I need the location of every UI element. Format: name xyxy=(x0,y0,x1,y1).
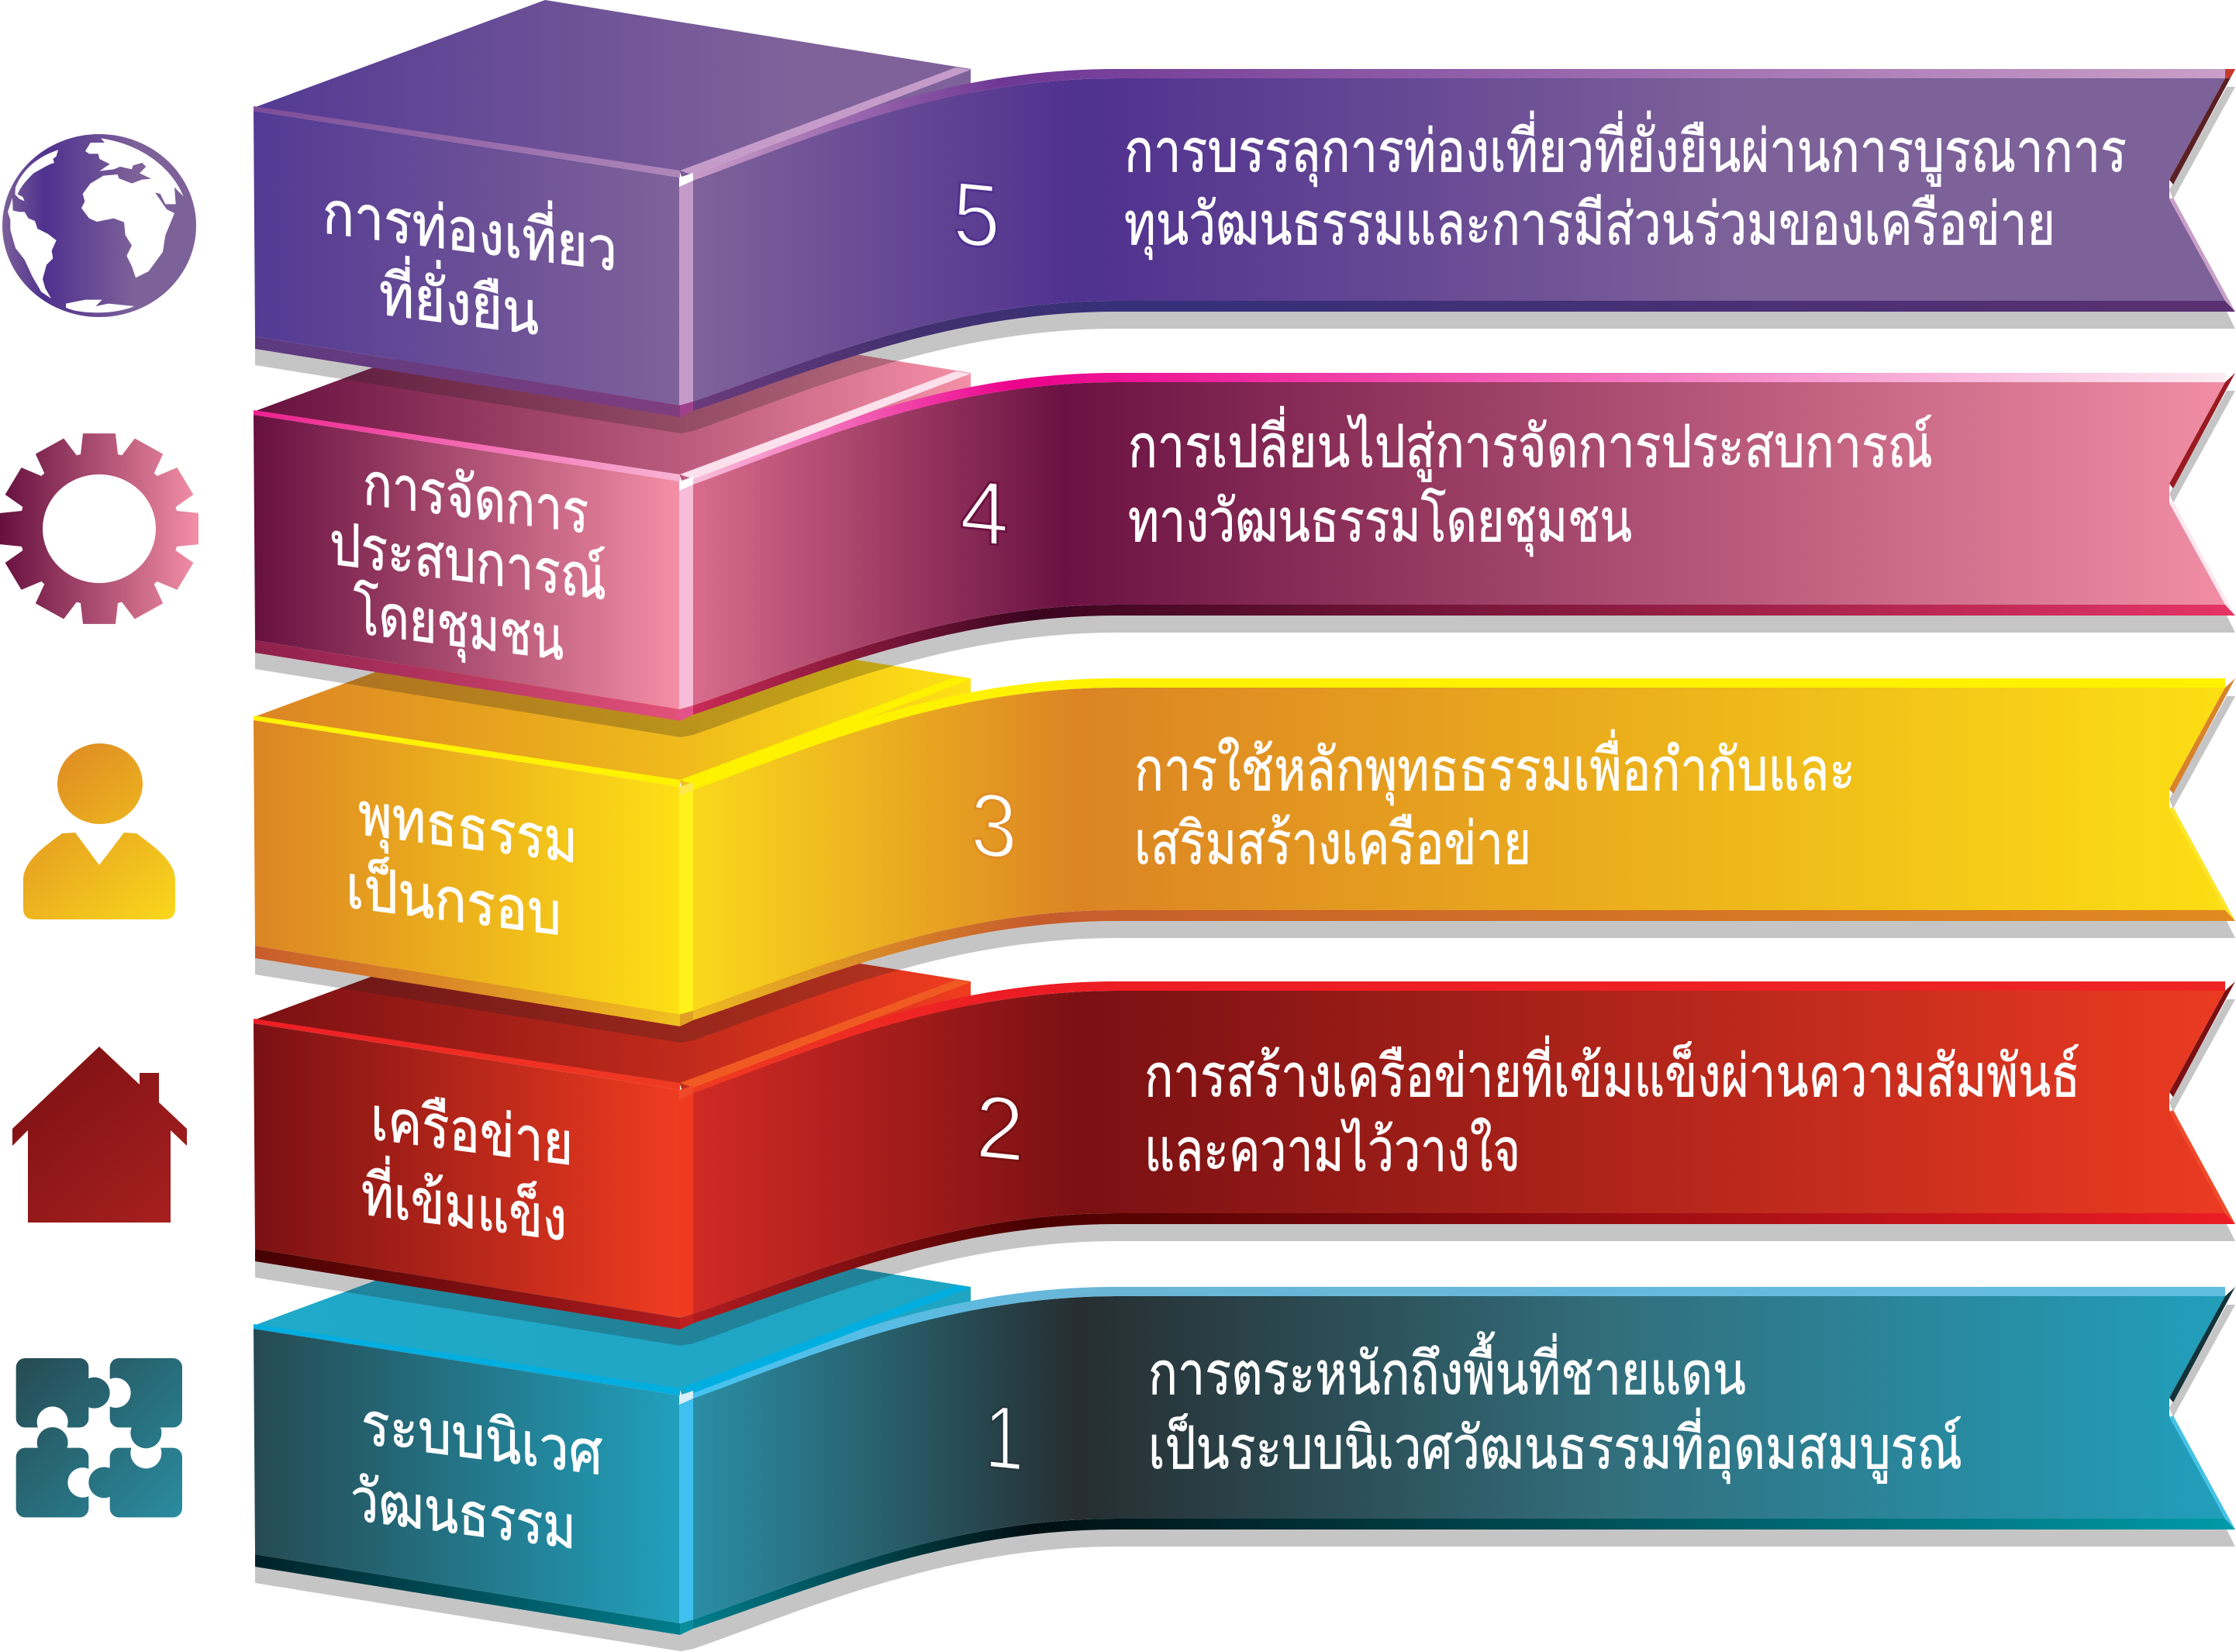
icon: puzzle xyxy=(16,1358,182,1517)
icon: gear xyxy=(0,433,198,624)
text block 1: เป็นระบบนิเวศวัฒนธรรมที่อุดมสมบูรณ์ xyxy=(1148,1408,1962,1484)
number 4: 4 xyxy=(960,460,1009,565)
heading: box label 2 xyxy=(361,1085,573,1254)
panel: level 5 sustainable tourism xyxy=(254,0,2235,433)
icon: person xyxy=(23,743,175,919)
icon: house xyxy=(12,1047,187,1223)
panel: level 4 community experience xyxy=(254,304,2235,737)
text block 1: การตระหนักถึงพื้นที่ชายแดน xyxy=(1148,1331,1746,1407)
number 3: 3 xyxy=(971,773,1017,878)
heading: box label 1: ระบบนิเวศ xyxy=(361,1390,602,1488)
icon: globe xyxy=(2,134,196,317)
heading: box label 1: วัฒนธรรม xyxy=(350,1466,576,1562)
number 5: 5 xyxy=(953,162,1000,267)
heading: box label 3 xyxy=(346,781,578,948)
text block 2 xyxy=(1144,1036,2080,1184)
text block 4: การเปลี่ยนไปสู่การจัดการประสบการณ์ xyxy=(1128,406,1933,482)
text block 3: การใช้หลักพุทธธรรมเพื่อกำกับและ xyxy=(1134,729,1855,805)
number 2: 2 xyxy=(975,1075,1024,1181)
text block 5: ทุนวัฒนธรรมและการมีส่วนร่วมของเครือข่าย xyxy=(1124,191,2055,260)
text block 2: และความไว้วางใจ xyxy=(1144,1117,1520,1184)
text block 4: ทางวัฒนธรรมโดยชุมชน xyxy=(1128,488,1632,557)
heading: box label 4: ประสบการณ์ xyxy=(330,510,606,612)
heading: box label 2: เครือข่าย xyxy=(371,1085,573,1178)
heading: box label 3: พุทธธรรม xyxy=(358,781,578,879)
text block 3: เสริมสร้างเครือข่าย xyxy=(1134,811,1531,877)
number 1: 1 xyxy=(985,1385,1023,1490)
panel: level 2 strong network xyxy=(254,912,2235,1346)
text block 1 xyxy=(1148,1331,1962,1484)
heading: box label 5 xyxy=(323,171,617,348)
heading: box label 4: การจัดการ xyxy=(363,450,588,547)
heading: box label 3: เป็นกรอบ xyxy=(346,851,561,948)
heading: box label 2: ที่เข้มแข็ง xyxy=(361,1152,567,1254)
panel: level 1 ecosystem xyxy=(254,1218,2235,1651)
text block 4 xyxy=(1128,406,1933,557)
heading: box label 5: การท่องเที่ยว xyxy=(323,171,617,284)
heading: box label 4: โดยชุมชน xyxy=(354,578,564,676)
text block 3 xyxy=(1134,729,1855,877)
heading: box label 5: ที่ยั่งยืน xyxy=(379,252,539,348)
text block 5 xyxy=(1124,111,2127,260)
heading: box label 4 xyxy=(330,450,606,676)
heading: box label 1 xyxy=(350,1390,602,1562)
panel: level 3 buddhist framework xyxy=(254,609,2235,1043)
